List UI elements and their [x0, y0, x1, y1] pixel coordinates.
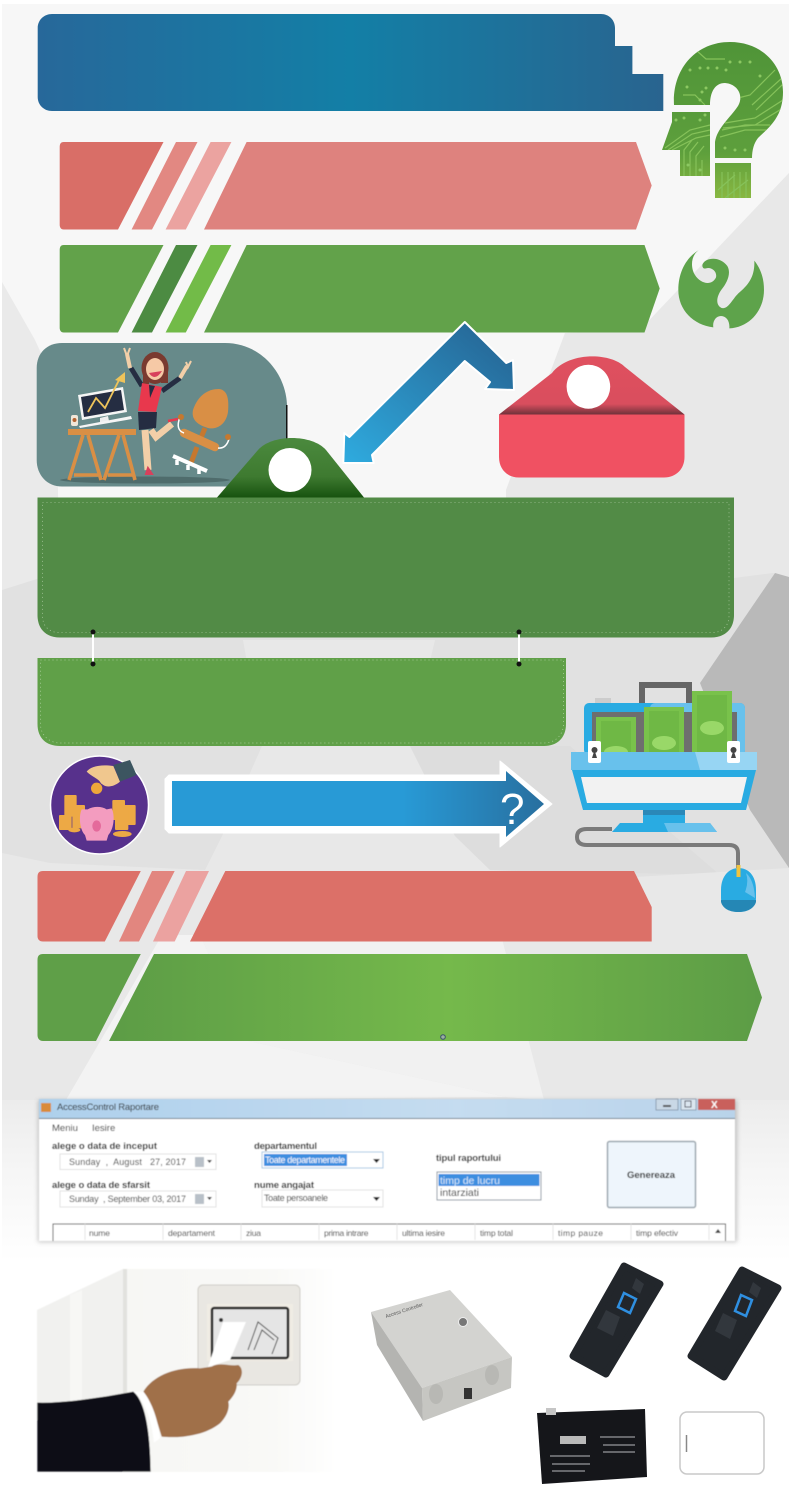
- report type list: timp de lucru: [440, 1175, 500, 1187]
- report type list: intarziati: [440, 1187, 479, 1199]
- controller box: [371, 1290, 512, 1421]
- employee select: nume angajat: [254, 1180, 315, 1191]
- green tab with circle: [217, 438, 364, 498]
- results table header: ultima iesire: [402, 1228, 445, 1238]
- department select: departamentul: [254, 1141, 317, 1152]
- icon: desk: [68, 429, 136, 480]
- circuit question mark icon: [660, 40, 790, 200]
- reader plate: [198, 1285, 300, 1385]
- menu: Meniu: [52, 1123, 78, 1134]
- department select: [254, 1141, 383, 1168]
- start date: [52, 1141, 216, 1170]
- icon: mouse: [721, 865, 756, 912]
- menu: [52, 1123, 115, 1134]
- double-headed arrow: [343, 322, 514, 463]
- large green panel: [38, 498, 734, 638]
- window buttons: [656, 1099, 735, 1111]
- connector left: [90, 630, 96, 666]
- icon: question mark circle: [678, 249, 764, 328]
- window buttons: X: [711, 1100, 718, 1111]
- end date: alege o data de sfarsit: [52, 1180, 151, 1191]
- report type list: [436, 1153, 541, 1200]
- green banner 2: [38, 954, 762, 1041]
- results table header: departament: [168, 1228, 216, 1238]
- results table header: [53, 1224, 726, 1241]
- connector right: [516, 630, 522, 666]
- software window: AccessControl Raportare: [38, 1099, 737, 1242]
- results table header: timp total: [480, 1228, 513, 1238]
- employee select: Toate persoanele: [264, 1193, 328, 1203]
- cuff: [133, 1392, 160, 1443]
- start date: alege o data de inceput: [52, 1141, 158, 1152]
- results table header: timp efectiv: [636, 1228, 679, 1238]
- start date: Sunday , August 27, 2017: [69, 1157, 186, 1167]
- small green panel: [38, 658, 566, 746]
- icon: banknotes: [596, 691, 732, 758]
- blank access card: [680, 1412, 764, 1474]
- photo panel: happy woman at desk: [37, 343, 288, 486]
- controller box: Access Controller: [385, 1302, 424, 1320]
- icon: woman: [124, 348, 191, 474]
- card reader 2: [691, 1270, 778, 1377]
- battery: [537, 1408, 647, 1484]
- blue arrow: [165, 761, 552, 847]
- report type list: tipul raportului: [436, 1153, 501, 1164]
- menu: Iesire: [92, 1123, 115, 1134]
- card reader 1: [573, 1266, 660, 1374]
- photo: hand with access card at reader: [37, 1269, 339, 1472]
- red tab with circle: [499, 356, 684, 478]
- end date: [52, 1180, 216, 1207]
- results table header: prima intrare: [324, 1228, 369, 1238]
- department select: Toate departamentele: [265, 1155, 345, 1165]
- end date: Sunday , September 03, 2017: [69, 1194, 186, 1204]
- icon: piggy bank circle: [50, 756, 148, 854]
- green banner 1: [60, 245, 660, 332]
- icon: laptop with chart: [71, 372, 132, 428]
- employee select: [254, 1180, 383, 1207]
- red banner 1: [60, 142, 652, 230]
- results table header: ziua: [246, 1228, 261, 1238]
- hand: [143, 1364, 242, 1437]
- icon: tipped office chair: [173, 389, 231, 474]
- generate button: [608, 1142, 696, 1208]
- results table header: nume: [89, 1228, 110, 1238]
- sleeve: [37, 1392, 151, 1472]
- software window: AccessControl Raportare: AccessControl Raportare: [57, 1102, 159, 1113]
- generate button: Genereaza: [627, 1170, 676, 1181]
- red banner 2: [38, 871, 652, 942]
- results table header: timp pauze: [558, 1228, 603, 1238]
- computer with cash: [571, 685, 757, 912]
- blue arrow: ?: [500, 785, 524, 834]
- header banner: [38, 14, 663, 111]
